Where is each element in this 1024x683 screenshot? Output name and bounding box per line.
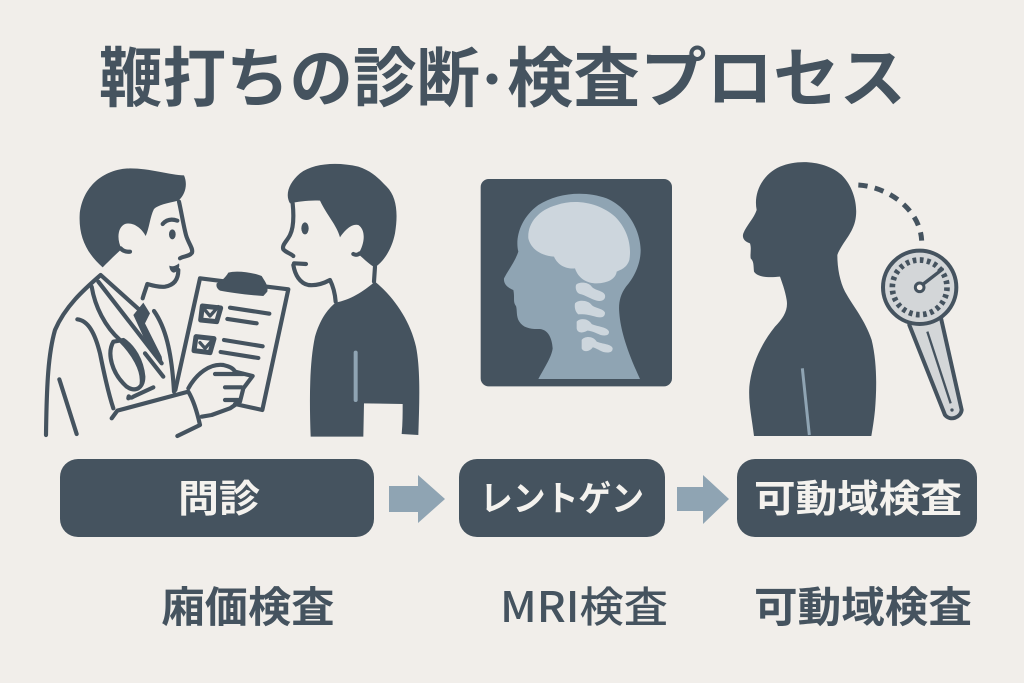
cervical vertebrae (575, 283, 613, 352)
title: 鞭打ちの診断 (99, 42, 480, 115)
panel: X-ray image (481, 179, 672, 386)
icon: range-of-motion measurement (743, 162, 962, 436)
arrow: step 2 to 3 (677, 475, 729, 524)
label: step 1 exam: 廂偭検査 (162, 584, 334, 631)
arrow: step 1 to 2 (389, 475, 445, 523)
doctor (46, 168, 288, 436)
button: step 3: 可動域検査 (754, 479, 962, 521)
icon: doctor and patient consultation (46, 164, 419, 437)
button: step 3 (737, 459, 977, 537)
goniometer (883, 251, 962, 418)
label: step 2 exam: MRI検査 (500, 574, 668, 635)
patient (283, 164, 419, 437)
dashed motion arc (858, 185, 922, 241)
label: step 3 exam: 可動域検査 (754, 584, 972, 631)
head and neck silhouette (504, 194, 641, 379)
button: step 1: 問診 (178, 479, 260, 521)
button: step 1 (60, 459, 374, 537)
head and torso silhouette (743, 162, 876, 436)
brain (528, 202, 630, 283)
button: step 2: レントゲン (480, 480, 644, 519)
button: step 2 (459, 459, 665, 537)
title (99, 42, 906, 115)
title: 検査プロセス (507, 42, 906, 115)
